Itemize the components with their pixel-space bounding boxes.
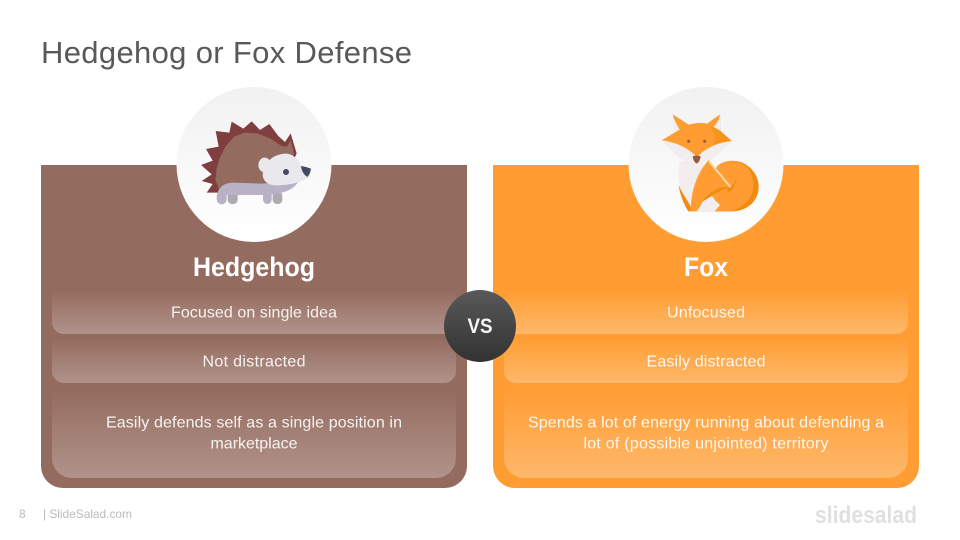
page number: 8	[19, 507, 26, 521]
item box: easily defends self: Easily defends self as a single position in	[106, 414, 402, 432]
item box: easily distracted: Easily distracted	[646, 354, 766, 370]
vs badge	[444, 290, 516, 362]
logo: slidesalad	[815, 502, 917, 529]
item box: easily defends self	[52, 388, 456, 478]
item box: spends a lot of energy	[504, 388, 908, 478]
item box: unfocused: Unfocused	[667, 304, 745, 322]
item box: not distracted	[52, 338, 456, 383]
item box: spends a lot of energy: Spends a lot of energy running about defending a	[528, 414, 884, 432]
item box: spends a lot of energy: lot of (possible unjointed) territory	[584, 436, 828, 452]
title: Hedgehog or Fox Defense	[41, 35, 412, 70]
body	[691, 160, 731, 211]
item box: not distracted: Not distracted	[202, 354, 306, 370]
panel: hedgehog	[41, 165, 467, 488]
item box: unfocused	[504, 290, 908, 334]
icon: hedgehog in circle	[176, 87, 332, 242]
ears	[673, 114, 688, 133]
icon: fox in circle	[628, 87, 784, 242]
item box: easily distracted	[504, 338, 908, 383]
footer source: | SlideSalad.com	[43, 507, 132, 521]
item box: easily defends self: marketplace	[210, 436, 298, 452]
tail	[710, 161, 759, 211]
vs badge: VS	[468, 315, 492, 338]
item box: focused on single idea	[52, 290, 456, 334]
panel: fox	[493, 165, 919, 488]
heading: hedgehog: Hedgehog	[193, 252, 315, 282]
item box: focused on single idea: Focused on single idea	[171, 304, 337, 322]
chest	[679, 158, 707, 211]
head	[662, 140, 732, 164]
heading: fox: Fox	[684, 252, 728, 282]
